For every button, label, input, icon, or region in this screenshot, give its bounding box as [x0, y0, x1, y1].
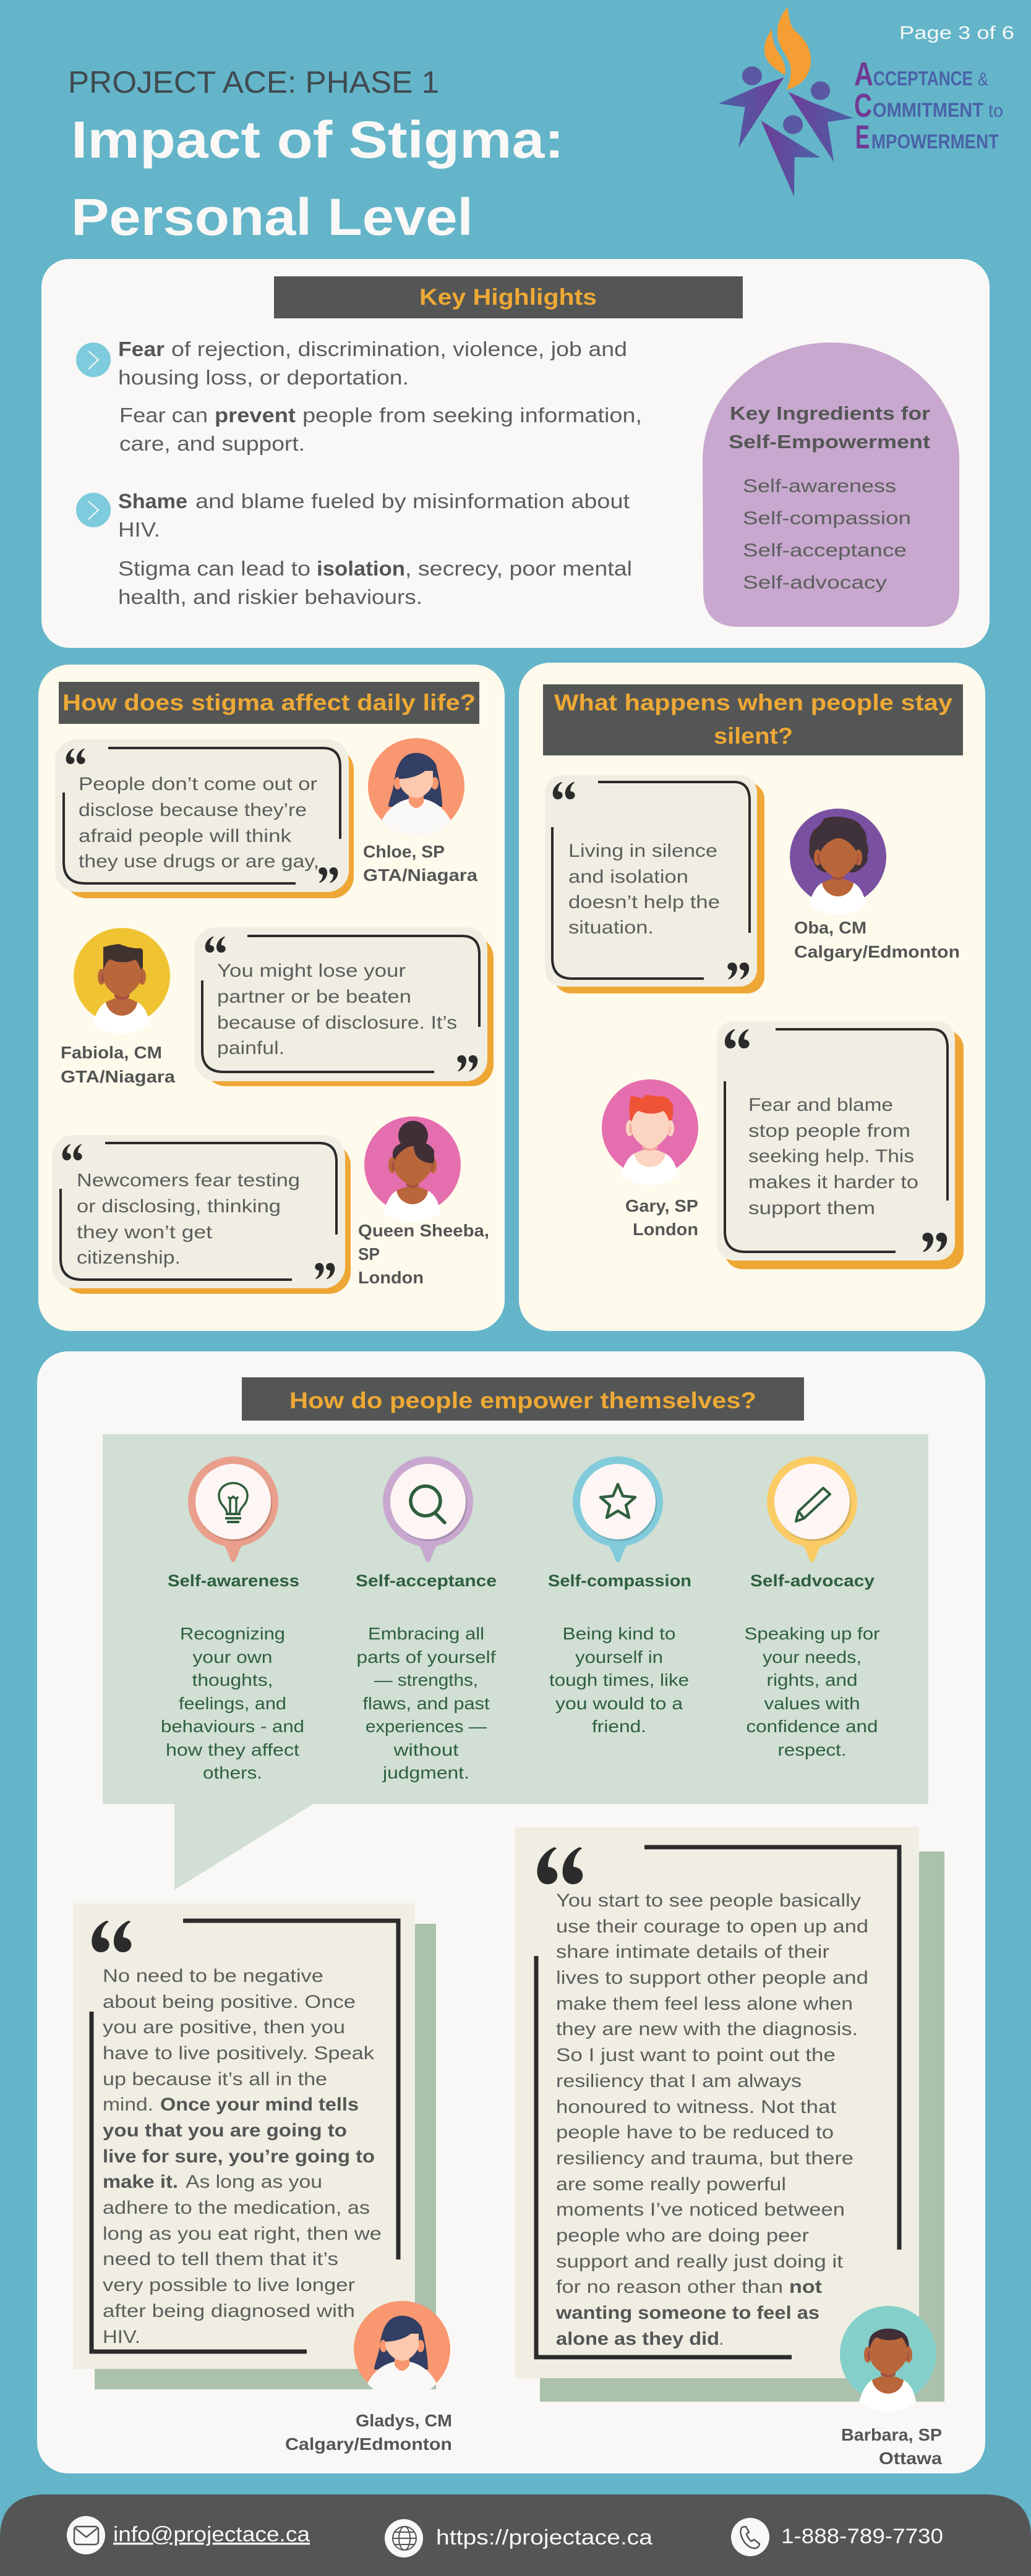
column: self-compassion	[548, 1571, 691, 1736]
quote: Newcomers: they won’t get	[77, 1222, 213, 1243]
column: self-awareness	[161, 1571, 304, 1782]
logo: Acceptance and Commitment to Empowerment	[719, 7, 1003, 197]
name: Oba: Oba, CM	[794, 918, 866, 937]
quote: Gladys: live for sure, you’re going to	[103, 2146, 375, 2167]
name: Fabiola: Fabiola, CM	[61, 1043, 162, 1062]
logo wordmark: &	[978, 69, 988, 90]
contact: website	[385, 2519, 652, 2557]
pin icon: pencil	[767, 1456, 857, 1562]
column: self-awareness: your own	[193, 1647, 272, 1667]
name: Fabiola	[61, 1043, 175, 1086]
bullet: shame: health, and riskier behaviours.	[118, 585, 422, 608]
avatar: Fabiola	[74, 928, 170, 1034]
bullet: fear	[76, 338, 642, 455]
quote: Newcomers	[52, 1135, 351, 1294]
quote: Barbara: support and really just doing it	[556, 2251, 844, 2272]
column: self-awareness: Self-awareness	[168, 1571, 299, 1590]
avatar: Gladys	[354, 2301, 450, 2399]
quote: Barbara: lives to support other people and	[556, 1968, 868, 1988]
column: self-acceptance: flaws, and past	[362, 1694, 490, 1713]
quote: Barbara: for no reason other than	[556, 2277, 783, 2297]
avatar: Gary	[602, 1079, 698, 1185]
avatar: Oba	[790, 809, 886, 914]
quote: Fabiola: partner or be beaten	[217, 987, 411, 1007]
quote: Gladys: long as you eat right, then we	[103, 2224, 382, 2244]
main title: Personal Level	[71, 188, 473, 246]
name: Oba	[794, 918, 960, 961]
callout: key ingredients: Self-compassion	[743, 508, 911, 529]
column: self-advocacy	[745, 1571, 879, 1759]
pin icon: magnifying glass	[383, 1456, 473, 1562]
quote: Barbara: wanting someone to feel as	[555, 2303, 819, 2323]
bullet: shame	[76, 490, 632, 608]
bullet: shame: HIV.	[118, 518, 160, 541]
speech panel: four self-empowerment items	[103, 1434, 928, 1890]
heading: silence: silent?	[714, 723, 793, 749]
column: self-acceptance: Self-acceptance	[356, 1571, 497, 1590]
name: Barbara	[841, 2425, 942, 2468]
quote: fear and blame: seeking help. This	[748, 1146, 914, 1167]
logo emblem	[719, 7, 853, 197]
logo wordmark: A	[854, 56, 873, 93]
quote: Barbara: honoured to witness. Not that	[556, 2097, 837, 2117]
quote: Barbara: alone as they did	[556, 2329, 719, 2349]
bullet: shame: Stigma can lead to	[118, 557, 310, 580]
column: self-advocacy: respect.	[778, 1740, 846, 1759]
quote: fear and blame: support them	[748, 1198, 875, 1218]
bullet: shame: isolation	[317, 557, 405, 580]
contact: phone	[731, 2518, 943, 2556]
heading: silence	[543, 684, 963, 755]
name: Queen Sheeba: Queen Sheeba,	[358, 1221, 489, 1240]
quote: Gladys: As long as you	[186, 2172, 322, 2192]
contact: phone: 1-888-789-7730	[781, 2525, 943, 2548]
column: self-acceptance: judgment.	[382, 1763, 469, 1782]
footer: contact bar	[0, 2494, 1031, 2576]
column: self-advocacy: Speaking up for	[745, 1624, 879, 1643]
quote: Gladys: about being positive. Once	[103, 1992, 356, 2012]
column: self-acceptance: Embracing all	[368, 1624, 484, 1643]
panel: how do people empower themselves	[37, 1351, 985, 2473]
quote: living in silence	[545, 775, 764, 993]
quote: Chloe: People don’t come out or	[79, 774, 317, 794]
name: Chloe: Chloe, SP	[363, 842, 445, 861]
callout: key ingredients: Self-awareness	[743, 476, 896, 496]
name: Gladys	[285, 2411, 452, 2454]
callout: key ingredients: Key Ingredients for	[730, 402, 930, 424]
quote: Fabiola: You might lose your	[217, 961, 406, 981]
quote: living in silence: doesn’t help the	[568, 892, 720, 912]
quote: living in silence: situation.	[568, 917, 654, 938]
quote: Barbara	[515, 1827, 944, 2402]
contact: website: https://projectace.ca	[436, 2526, 652, 2549]
bullet: shame: , secrecy, poor mental	[405, 557, 632, 580]
column: self-acceptance	[356, 1571, 497, 1782]
callout: key ingredients: Self-Empowerment	[729, 431, 930, 453]
quote: Barbara: not	[789, 2277, 822, 2297]
quote: Newcomers: or disclosing, thinking	[77, 1196, 281, 1217]
name: Gladys: Gladys, CM	[356, 2411, 452, 2430]
quote: Barbara: use their courage to open up and	[556, 1916, 868, 1937]
logo wordmark	[854, 56, 1003, 156]
quote: Barbara: make them feel less alone when	[556, 1994, 853, 2014]
column: self-advocacy: confidence and	[746, 1717, 878, 1736]
quote: Barbara: share intimate details of their	[556, 1942, 829, 1962]
heading: daily life	[59, 682, 479, 724]
bullet: fear: Fear can	[119, 404, 208, 427]
page number: Page 3 of 6	[899, 23, 1014, 43]
bullet: fear: care, and support.	[119, 432, 305, 455]
name: Queen Sheeba	[358, 1221, 489, 1287]
column: self-awareness: how they affect	[166, 1740, 299, 1759]
quote: Gladys: very possible to live longer	[103, 2275, 355, 2295]
column: self-awareness: behaviours - and	[161, 1717, 304, 1736]
name: Gary	[625, 1196, 698, 1239]
quote: Barbara: So I just want to point out the	[556, 2045, 836, 2065]
column: self-compassion: friend.	[592, 1717, 646, 1736]
pin icon: light bulb	[188, 1456, 278, 1562]
column: self-compassion: tough times, like	[549, 1670, 689, 1690]
name: Barbara: Barbara, SP	[841, 2425, 942, 2444]
name: Chloe	[363, 842, 477, 885]
logo wordmark: OMMITMENT	[873, 99, 983, 121]
quote: Barbara: resiliency and trauma, but there	[556, 2148, 853, 2169]
quote: Gladys: you that you are going to	[103, 2120, 347, 2141]
column: self-compassion: Being kind to	[563, 1624, 675, 1643]
quote: Gladys: need to tell them that it’s	[103, 2249, 338, 2269]
name: Gary: London	[633, 1220, 698, 1239]
contact: email: info@projectace.ca	[113, 2523, 310, 2546]
quote: fear and blame: Fear and blame	[748, 1095, 893, 1115]
panel: key highlights	[41, 259, 990, 648]
name: Gary: Gary, SP	[625, 1196, 698, 1215]
avatar: Queen Sheeba	[364, 1116, 461, 1222]
quote: Fabiola: painful.	[217, 1038, 284, 1058]
quote: Fabiola: because of disclosure. It’s	[217, 1013, 457, 1033]
quote: Chloe: disclose because they’re	[79, 800, 307, 820]
heading: empower	[242, 1377, 804, 1421]
contact: email	[67, 2516, 310, 2554]
bullet: fear: Fear	[118, 338, 165, 360]
logo wordmark: E	[855, 119, 870, 156]
quote: fear and blame	[717, 1021, 964, 1269]
quote: living in silence: Living in silence	[568, 841, 717, 861]
name: Barbara: Ottawa	[879, 2449, 942, 2468]
quote: Gladys: Once your mind tells	[160, 2094, 359, 2115]
quote: Barbara: are some really powerful	[556, 2174, 786, 2195]
quote: Fabiola	[194, 927, 494, 1086]
column: self-compassion: you would to a	[555, 1694, 683, 1713]
name: Chloe: GTA/Niagara	[363, 865, 477, 885]
logo wordmark: to	[988, 101, 1003, 121]
heading: daily life: How does stigma affect daily life?	[62, 690, 476, 715]
quote: Barbara: they are new with the diagnosis.	[556, 2019, 858, 2039]
column: self-compassion: Self-compassion	[548, 1571, 691, 1590]
column: self-compassion: yourself in	[575, 1647, 663, 1667]
name: Gladys: Calgary/Edmonton	[285, 2434, 452, 2454]
panel: what happens when people stay silent	[519, 663, 985, 1331]
quote: Chloe: afraid people will think	[79, 826, 292, 846]
project label: PROJECT ACE: PHASE 1	[68, 65, 439, 100]
column: self-acceptance: parts of yourself	[356, 1647, 496, 1667]
callout: key ingredients: Self-acceptance	[743, 540, 907, 561]
bullet: fear: of rejection, discrimination, violence, job and	[171, 338, 627, 360]
quote: Gladys	[73, 1903, 436, 2389]
bullet: fear: people from seeking information,	[302, 404, 642, 427]
column: self-awareness: Recognizing	[180, 1624, 285, 1643]
column: self-awareness: feelings, and	[179, 1694, 286, 1713]
quote: Gladys: No need to be negative	[103, 1966, 323, 1986]
quote: Barbara: moments I’ve noticed between	[556, 2200, 845, 2220]
quote: Gladys: after being diagnosed with	[103, 2301, 355, 2321]
quote: fear and blame: stop people from	[748, 1121, 910, 1141]
column: self-advocacy: values with	[764, 1694, 860, 1713]
main title	[71, 111, 564, 246]
name: Queen Sheeba: SP	[358, 1244, 380, 1264]
logo wordmark: CCEPTANCE	[873, 67, 973, 90]
column: self-advocacy: your needs,	[763, 1647, 862, 1667]
panel: how does stigma affect daily life	[38, 665, 505, 1331]
column: self-acceptance: without	[393, 1740, 459, 1759]
quote: Chloe	[55, 739, 354, 898]
avatar: Barbara	[840, 2306, 936, 2412]
callout: key ingredients	[703, 342, 959, 627]
quote: Gladys: you are positive, then you	[103, 2017, 345, 2038]
heading: key highlights	[274, 276, 743, 318]
bullet: fear: prevent	[215, 404, 296, 427]
logo wordmark: MPOWERMENT	[871, 130, 999, 153]
quote: Newcomers: Newcomers fear testing	[77, 1170, 300, 1191]
main title: Impact of Stigma:	[71, 111, 564, 169]
quote: Newcomers: citizenship.	[77, 1248, 181, 1268]
header: project and title	[68, 65, 564, 246]
column: self-awareness: others.	[203, 1763, 262, 1782]
quote: Gladys: up because it’s all in the	[103, 2069, 327, 2089]
name: Queen Sheeba: London	[358, 1268, 424, 1287]
quote: Barbara: people who are doing peer	[556, 2225, 809, 2246]
quote: Gladys: mind.	[103, 2094, 153, 2115]
column: self-advocacy: Self-advocacy	[750, 1571, 875, 1590]
name: Oba: Calgary/Edmonton	[794, 942, 960, 961]
bullet: shame: and blame fueled by misinformation about	[195, 490, 630, 512]
quote: Gladys: have to live positively. Speak	[103, 2043, 375, 2064]
column: self-acceptance: — strengths,	[374, 1670, 478, 1690]
heading: empower: How do people empower themselves?	[289, 1388, 756, 1413]
quote: Barbara: You start to see people basically	[556, 1890, 861, 1911]
logo wordmark: C	[854, 87, 872, 124]
name: Fabiola: GTA/Niagara	[61, 1067, 175, 1086]
heading: key highlights: Key Highlights	[419, 284, 597, 310]
heading: silence: What happens when people stay	[554, 690, 952, 715]
quote: fear and blame: makes it harder to	[748, 1172, 918, 1192]
quote: Barbara: resiliency that I am always	[556, 2071, 802, 2091]
pin icon: star	[573, 1456, 663, 1562]
quote: Gladys: HIV.	[103, 2327, 140, 2347]
column: self-awareness: thoughts,	[192, 1670, 273, 1690]
quote: Barbara: people have to be reduced to	[556, 2122, 834, 2143]
callout: key ingredients: Self-advocacy	[743, 572, 887, 593]
quote: Gladys: make it.	[103, 2172, 178, 2192]
quote: Barbara: .	[719, 2329, 724, 2349]
bullet: fear: housing loss, or deportation.	[118, 366, 409, 389]
column: self-advocacy: rights, and	[767, 1670, 857, 1690]
bullet: shame: Shame	[118, 490, 187, 512]
column: self-acceptance: experiences —	[366, 1717, 487, 1736]
quote: Gladys: adhere to the medication, as	[103, 2198, 370, 2218]
quote: Chloe: they use drugs or are gay,	[79, 851, 319, 872]
avatar: Chloe	[368, 738, 464, 836]
quote: living in silence: and isolation	[568, 867, 688, 887]
